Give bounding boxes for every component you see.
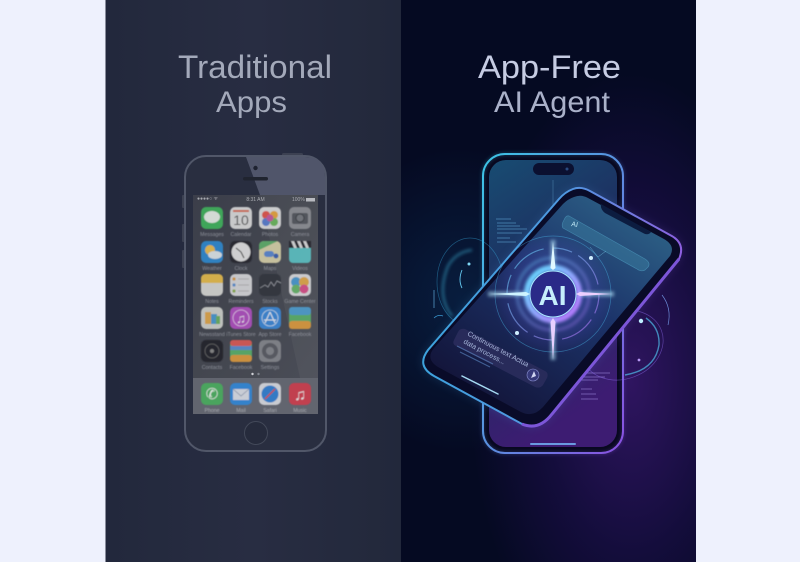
tilted phone [423,188,681,426]
heading: App-Free AI Agent: App-Free [478,49,621,85]
app: Notes: Notes [205,299,219,305]
app: Messages [200,207,224,238]
app: Game Center: Game Center [284,299,316,305]
app: Contacts: Contacts [202,365,223,371]
panel: app-free AI agent [401,0,696,562]
icon: classic smartphone [182,153,326,451]
dock app: Phone [201,383,223,414]
app: App Store [258,307,282,338]
task card: data process... [462,339,506,366]
phone screen: ●●●●○ ᯤ [197,196,218,202]
app: Game Center [284,274,316,305]
dock app: Phone: Phone [204,408,220,414]
app: iTunes Store: ♫ [236,311,246,326]
phone body [182,153,326,451]
app: Stocks: Stocks [262,299,278,305]
app: Camera [289,207,311,238]
app: Photos [259,207,281,238]
orbit rings [434,238,673,391]
dock app: Phone: ✆ [206,386,218,403]
app: Maps [259,241,281,272]
heading: App-Free AI Agent [478,49,621,119]
app: Clock: Clock [235,266,248,272]
dock app: Safari: Safari [263,408,277,414]
heading: App-Free AI Agent: AI Agent [494,86,611,119]
heading: Traditional Apps: Traditional [178,49,332,85]
dock app: Music [289,383,311,414]
app: Photos: Photos [262,232,278,238]
app: iTunes Store [226,307,256,338]
app: Weather: Weather [202,266,222,272]
task card: Continuous text Actua [466,331,530,369]
app: Weather [201,241,223,272]
AI search pill [562,216,649,271]
back phone data lines [496,219,610,399]
dock app: Music: ♫ [294,387,306,404]
illustration: AI phone [423,154,681,453]
app: Settings [259,340,281,371]
task card [453,329,548,394]
app: iTunes Store: iTunes Store [226,332,256,338]
app: Contacts [201,340,223,371]
app: Calendar: Calendar [230,232,252,238]
app: Facebook [289,307,312,338]
app: Reminders: Reminders [228,299,254,305]
dock app: Safari [259,383,281,414]
app: Facebook second: Facebook [230,365,253,371]
app: Maps: Maps [264,266,277,272]
app: Reminders [228,274,254,305]
app: App Store: App Store [258,332,282,338]
dock app: Mail: Mail [236,408,246,414]
dock app: Music: Music [293,408,307,414]
heading: Traditional Apps: Apps [216,86,287,119]
app: Camera: Camera [291,232,309,238]
phone screen [193,195,318,414]
back phone [483,154,623,453]
panel: traditional apps [106,0,402,562]
app: Notes [201,274,223,305]
AI core emblem [488,232,615,360]
app: Stocks [259,274,281,305]
app: Clock [230,241,252,272]
light flares [488,240,614,360]
app icon grid [199,207,316,414]
app: Messages: Messages [200,232,224,238]
app: Calendar: 10 [233,212,249,228]
app: Newsstand: Newsstand [199,332,225,338]
dock app: Mail [230,383,252,414]
app: Newsstand [199,307,225,338]
app: Calendar [230,207,252,238]
AI core emblem: AI [538,280,566,311]
app: Videos: Videos [292,266,308,272]
app: Facebook second [230,340,253,371]
heading: Traditional Apps [178,49,332,119]
app: Videos [289,241,311,272]
phone screen: 100% [292,197,305,203]
app: Settings: Settings [261,365,280,371]
app: Facebook: Facebook [289,332,312,338]
AI search pill: AI [571,221,578,229]
phone screen: 8:31 AM [246,197,265,203]
